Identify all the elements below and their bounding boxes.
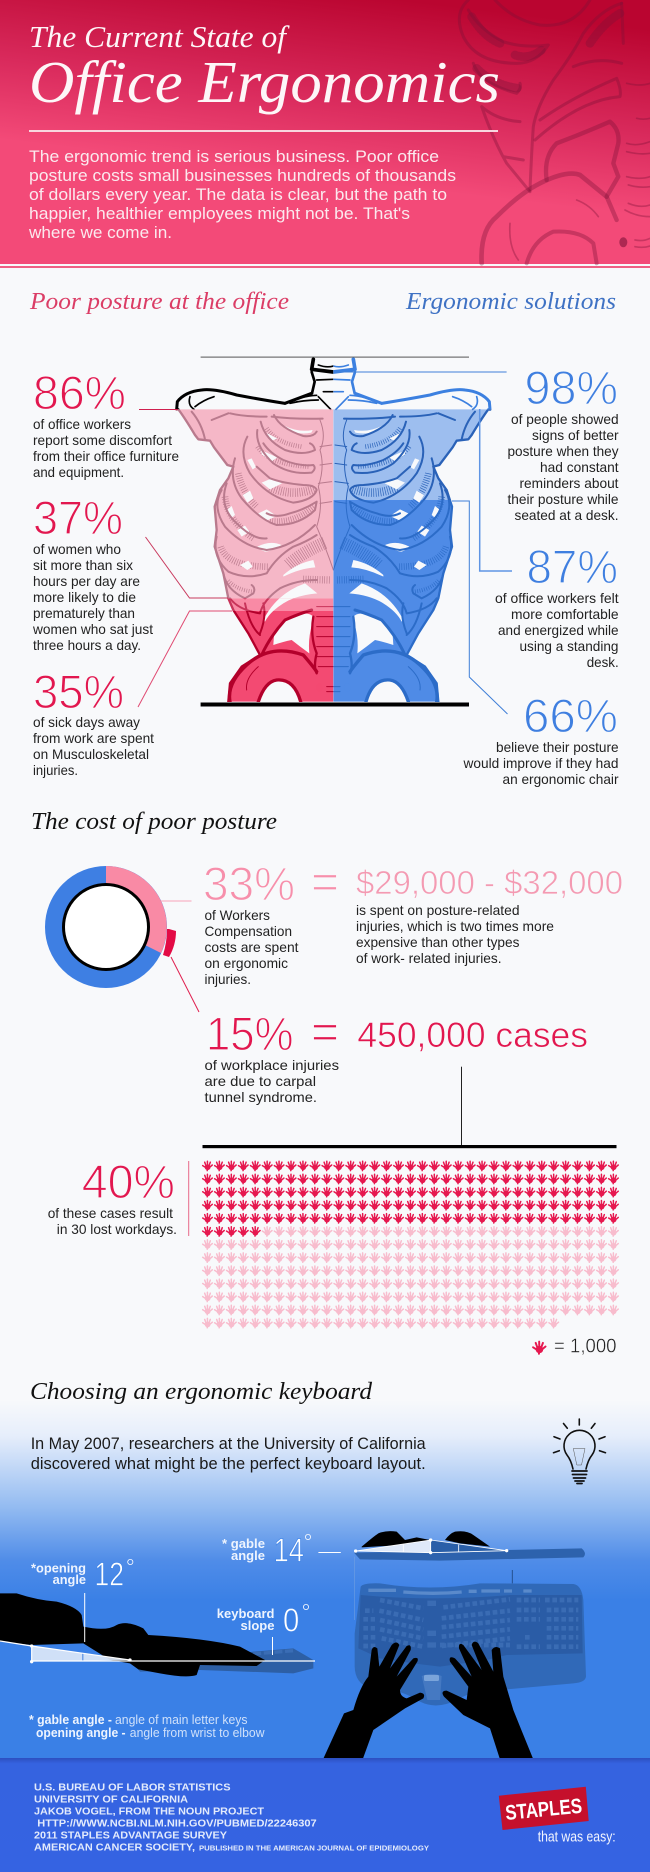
stat: 15%: are due to carpal bbox=[204, 1073, 316, 1089]
sources: 2011 STAPLES ADVANTAGE SURVEY bbox=[34, 1830, 227, 1842]
footnote: angle from wrist to elbow bbox=[130, 1726, 265, 1740]
stat: 37%: sit more than six bbox=[33, 557, 133, 573]
stat: 40% bbox=[48, 1155, 189, 1237]
sources: HTTP://WWW.NCBI.NLM.NIH.GOV/PUBMED/22246307 bbox=[37, 1818, 317, 1830]
stat: 33% bbox=[203, 856, 623, 987]
label: gable angle: * gable bbox=[222, 1536, 265, 1551]
intro text: of dollars every year. The data is clear, but the path to bbox=[29, 185, 447, 204]
label: keyboard slope: keyboard bbox=[217, 1606, 275, 1621]
stat: 40%: of these cases result bbox=[48, 1205, 173, 1221]
stat: 33%: 33% bbox=[203, 857, 295, 910]
stat: 33%: = bbox=[311, 856, 339, 909]
legend: = 1,000 bbox=[554, 1336, 616, 1358]
label: keyboard slope: slope bbox=[240, 1618, 274, 1633]
stat: 35%: of sick days away bbox=[33, 714, 140, 730]
donut chart bbox=[55, 866, 176, 978]
stat: 33%: injuries, which is two times more bbox=[356, 918, 554, 934]
stat: 37%: three hours a day. bbox=[33, 637, 141, 653]
logo: staples: STAPLES bbox=[504, 1795, 583, 1825]
footnote: opening angle - bbox=[36, 1726, 126, 1740]
skeleton illustration bbox=[177, 357, 490, 706]
stat: 66%: an ergonomic chair bbox=[502, 771, 619, 787]
stat: 86%: of office workers bbox=[33, 416, 131, 432]
stat: 35%: injuries. bbox=[33, 762, 78, 778]
stat: 37%: of women who bbox=[33, 541, 121, 557]
stat: 37%: women who sat just bbox=[32, 621, 153, 637]
stat: 66%: 66% bbox=[523, 689, 618, 742]
donut connectors bbox=[161, 901, 199, 1012]
stat: 86%: from their office furniture bbox=[33, 448, 179, 464]
stat: 33%: Compensation bbox=[204, 923, 292, 939]
stat: 87%: 87% bbox=[526, 540, 618, 593]
stat: 33%: is spent on posture-related bbox=[356, 902, 520, 918]
footnote bbox=[29, 1713, 265, 1740]
connector lines bbox=[138, 372, 512, 714]
stat: 87%: of office workers felt bbox=[495, 590, 619, 606]
intro text: posture costs small businesses hundreds of thousands bbox=[29, 166, 456, 185]
label: gable angle: 14 bbox=[274, 1531, 304, 1568]
stat: 15%: of workplace injuries bbox=[204, 1057, 339, 1073]
sources: JAKOB VOGEL, FROM THE NOUN PROJECT bbox=[34, 1806, 265, 1818]
stat: 33%: expensive than other types bbox=[356, 934, 520, 950]
stat: 66%: believe their posture bbox=[496, 739, 619, 755]
stat: 35%: on Musculoskeletal bbox=[33, 746, 149, 762]
label: opening angle: angle bbox=[53, 1572, 86, 1587]
intro text: In May 2007, researchers at the University of California bbox=[31, 1435, 426, 1453]
stat: 15%: = bbox=[311, 1006, 339, 1059]
panel: header bbox=[0, 0, 650, 268]
stat: 40%: in 30 lost workdays. bbox=[57, 1221, 177, 1237]
panel: footer bbox=[0, 1758, 650, 1872]
heading: cost of poor posture: The cost of poor posture bbox=[31, 809, 277, 835]
intro text: where we come in. bbox=[28, 223, 172, 242]
stat: 98%: signs of better bbox=[532, 427, 619, 443]
stat: 86%: report some discomfort bbox=[33, 432, 172, 448]
sources: UNIVERSITY OF CALIFORNIA bbox=[34, 1794, 188, 1806]
intro text bbox=[28, 147, 456, 242]
sources: AMERICAN CANCER SOCIETY, bbox=[34, 1842, 195, 1854]
label: keyboard slope: 0 bbox=[283, 1602, 299, 1639]
stat: 98%: of people showed bbox=[511, 411, 619, 427]
sources bbox=[34, 1782, 429, 1854]
stat: 87%: desk. bbox=[587, 654, 619, 670]
stat: 98%: reminders about bbox=[520, 475, 619, 491]
stat: 66%: would improve if they had bbox=[463, 755, 618, 771]
heading: keyboard: Choosing an ergonomic keyboard bbox=[30, 1379, 373, 1405]
label: opening angle bbox=[31, 1556, 133, 1642]
pictogram: hands bbox=[203, 1161, 618, 1328]
title: The Current State of bbox=[29, 19, 290, 54]
intro text: discovered what might be the perfect keyboard layout. bbox=[31, 1455, 426, 1473]
intro text: The ergonomic trend is serious business. Poor office bbox=[29, 147, 439, 166]
stat: 98%: seated at a desk. bbox=[514, 507, 618, 523]
stat: 33%: $29,000 - $32,000 bbox=[356, 864, 623, 901]
intro text bbox=[31, 1435, 426, 1473]
stat: 37%: hours per day are bbox=[33, 573, 140, 589]
stat: 33%: on ergonomic bbox=[204, 955, 288, 971]
label: gable angle bbox=[222, 1531, 341, 1568]
stat: 86%: and equipment. bbox=[33, 464, 124, 480]
stat: 15%: 450,000 cases bbox=[357, 1016, 588, 1055]
front view: keyboard top bbox=[355, 1583, 586, 1705]
stat: 98% bbox=[508, 361, 619, 523]
sources: PUBLISHED IN THE AMERICAN JOURNAL OF EPIDEMIOLOGY bbox=[199, 1844, 429, 1853]
stat: 15%: tunnel syndrome. bbox=[204, 1089, 317, 1105]
stat: 33%: injuries. bbox=[204, 971, 251, 987]
stat: 98%: their posture while bbox=[508, 491, 619, 507]
stat: 98%: had constant bbox=[540, 459, 619, 475]
stat: 86% bbox=[33, 366, 179, 480]
title bbox=[29, 19, 500, 115]
stat: 15% bbox=[204, 1006, 588, 1105]
footnote: angle of main letter keys bbox=[115, 1713, 248, 1727]
stat: 87%: and energized while bbox=[498, 622, 619, 638]
panel: keyboard section bbox=[0, 1379, 650, 1759]
stat: 35%: from work are spent bbox=[33, 730, 154, 746]
front view: keyboard edge bbox=[354, 1531, 585, 1620]
title: Office Ergonomics bbox=[29, 49, 500, 115]
stat: 87%: more comfortable bbox=[511, 606, 619, 622]
hands silhouette bbox=[323, 1642, 533, 1759]
stat: 98%: posture when they bbox=[508, 443, 618, 459]
stat: 33%: of work- related injuries. bbox=[356, 950, 502, 966]
stat: 33%: of Workers bbox=[204, 907, 270, 923]
footnote: * gable angle - bbox=[29, 1713, 112, 1727]
stat: 40%: 40% bbox=[82, 1155, 175, 1208]
stat: 37% bbox=[32, 491, 153, 653]
logo: staples: that was easy: bbox=[538, 1829, 616, 1846]
stat: 86%: 86% bbox=[33, 366, 126, 419]
stat: 87%: using a standing bbox=[520, 638, 618, 654]
stat: 15%: 15% bbox=[206, 1007, 294, 1060]
stat: 37%: more likely to die bbox=[33, 589, 136, 605]
heading: poor posture: Poor posture at the office bbox=[29, 289, 289, 315]
stat: 37%: 37% bbox=[33, 491, 123, 544]
stat: 87% bbox=[495, 540, 619, 670]
intro text: happier, healthier employees might not be. That's bbox=[29, 204, 410, 223]
stat: 98%: 98% bbox=[524, 361, 618, 414]
stat: 66% bbox=[463, 689, 619, 787]
bracket line bbox=[202, 1067, 616, 1148]
sources: U.S. BUREAU OF LABOR STATISTICS bbox=[34, 1782, 230, 1794]
heading: ergonomic solutions: Ergonomic solutions bbox=[405, 289, 616, 315]
stat: 35%: 35% bbox=[33, 665, 124, 718]
label: opening angle: *opening bbox=[31, 1560, 86, 1575]
stat: 37%: prematurely than bbox=[33, 605, 135, 621]
stat: 33%: costs are spent bbox=[204, 939, 299, 955]
background ribcage art bbox=[459, 0, 650, 263]
side view: arm and keyboard bbox=[0, 1593, 315, 1676]
label: gable angle: angle bbox=[231, 1548, 265, 1563]
logo: staples bbox=[499, 1787, 616, 1846]
label: opening angle: 12 bbox=[94, 1556, 124, 1593]
stat: 35% bbox=[33, 665, 154, 778]
icon: light bulb bbox=[554, 1419, 606, 1484]
label: keyboard slope bbox=[217, 1602, 309, 1655]
